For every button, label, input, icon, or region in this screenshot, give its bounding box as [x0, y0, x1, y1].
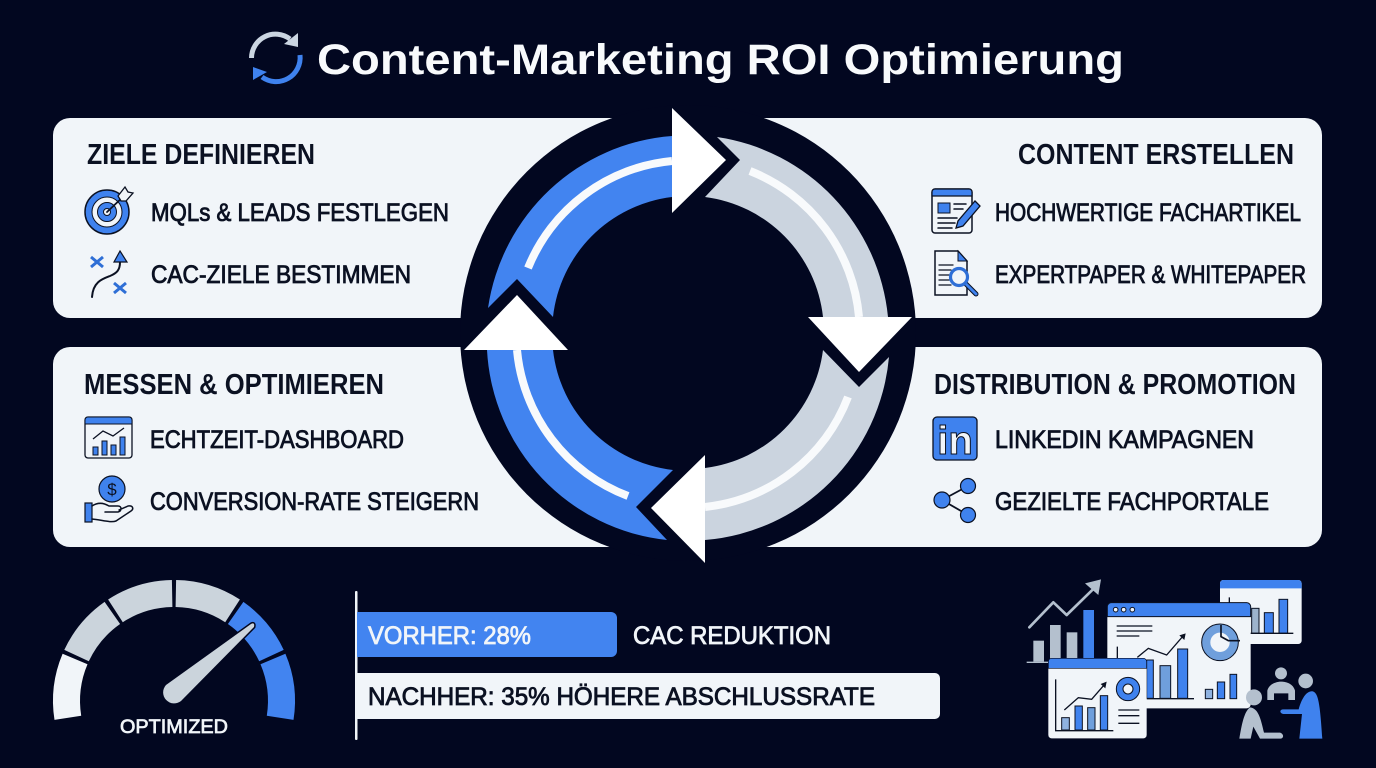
item: Echtzeit-Dashboard: ECHTZEIT-DASHBOARD: [150, 426, 404, 454]
before and after bars: [355, 591, 940, 740]
arrow: left: [651, 455, 705, 563]
icon: refresh arrows: [252, 33, 300, 82]
gauge needle: [163, 623, 254, 703]
item: Fachartikel: HOCHWERTIGE FACHARTIKEL: [995, 199, 1301, 227]
title text: Content-Marketing ROI Optimierung: [317, 36, 1124, 84]
item: Conversion-Rate: CONVERSION-RATE STEIGERN: [150, 488, 479, 516]
panel: Distribution und Promotion: [733, 347, 1322, 547]
gauge segment: white: [53, 654, 88, 720]
axis line: [355, 591, 358, 740]
front window: [1048, 658, 1147, 738]
growth chart: [1027, 579, 1101, 662]
people: [1239, 667, 1322, 739]
item: Fachportale: GEZIELTE FACHPORTALE: [995, 488, 1269, 516]
heading: Distribution und Promotion: DISTRIBUTION & PROMOTION: [934, 369, 1296, 401]
arc: bottom left blue: [487, 350, 673, 540]
icon: hand with coin: $: [107, 480, 117, 499]
illustration: analytics dashboards and team: [1027, 579, 1322, 739]
item: Expertpaper: EXPERTPAPER & WHITEPAPER: [995, 261, 1306, 289]
arrow: right: [672, 108, 726, 213]
arc: top left blue: [488, 136, 672, 317]
bar: before: [357, 612, 617, 657]
icon: article with pen: [932, 189, 980, 233]
gauge: [53, 580, 295, 738]
cycle diagram: [460, 105, 916, 563]
bar: after: [357, 673, 940, 719]
back window: [1220, 580, 1302, 644]
heading: Ziele definieren: ZIELE DEFINIEREN: [87, 139, 315, 171]
icon: strategy route: [91, 251, 127, 297]
title: [252, 33, 1124, 84]
heading: Messen und Optimieren: MESSEN & OPTIMIEREN: [84, 369, 384, 401]
bar: before: VORHER: 28%: [368, 622, 531, 650]
arrow: up: [464, 295, 568, 350]
arc: bottom right grey: [705, 350, 889, 540]
icon: share nodes: [934, 478, 976, 522]
item: LinkedIn Kampagnen: LINKEDIN KAMPAGNEN: [995, 426, 1254, 454]
item: MQLs und Leads: MQLs & LEADS FESTLEGEN: [151, 199, 449, 227]
bar: after: NACHHER: 35% HÖHERE ABSCHLUSSRATE: [368, 683, 875, 711]
gauge label: OPTIMIZED: [120, 717, 228, 738]
gauge segments: blue: [228, 602, 295, 720]
heading: Content erstellen: CONTENT ERSTELLEN: [1018, 139, 1294, 171]
icon: hand with coin: [85, 476, 133, 522]
icon: target: [85, 187, 133, 234]
arrow: down: [808, 317, 912, 372]
panel: Ziele definieren: [53, 118, 643, 318]
icon: dashboard: [85, 417, 132, 458]
panel: Messen und Optimieren: [53, 347, 643, 547]
main window: [1107, 603, 1251, 708]
panel: Content erstellen: [733, 118, 1322, 318]
gauge segments: grey: [64, 580, 240, 661]
arc: top right grey: [705, 137, 888, 317]
item: CAC-Ziele: CAC-ZIELE BESTIMMEN: [151, 261, 411, 289]
icon: LinkedIn: in: [937, 419, 973, 463]
icon: document with magnifier: [935, 251, 976, 295]
label: CAC Reduktion: CAC REDUKTION: [633, 622, 831, 650]
